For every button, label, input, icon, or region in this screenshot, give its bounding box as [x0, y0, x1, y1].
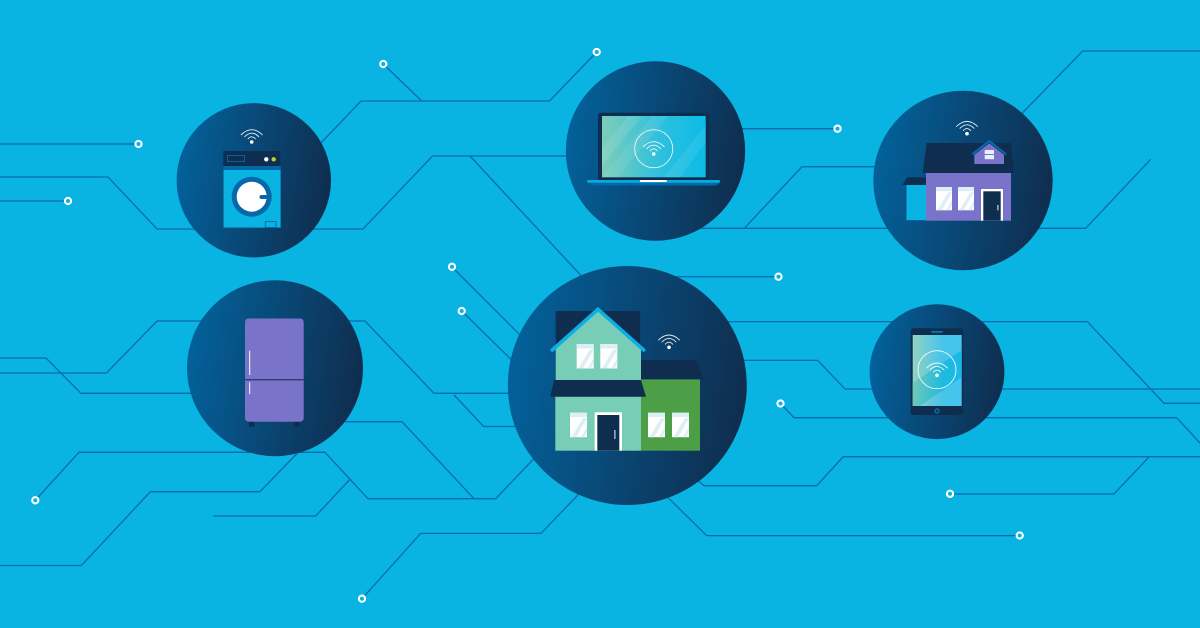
- icon: laptop: [587, 113, 720, 186]
- icon: refrigerator: [245, 318, 304, 427]
- panel: laptop: [566, 61, 745, 241]
- icon: house wifi: [956, 121, 978, 136]
- icon: purple house: [902, 141, 1014, 221]
- panel: refrigerator: [187, 280, 363, 456]
- panel: washing machine: [177, 103, 331, 258]
- panel: purple house: [873, 91, 1053, 270]
- icon: washer wifi: [241, 130, 262, 144]
- panel: central green house: [508, 266, 747, 505]
- panel: tablet: [870, 304, 1004, 439]
- icon: washing machine: [223, 151, 281, 228]
- icon: house wifi: [658, 335, 680, 349]
- icon: green house: [550, 309, 703, 451]
- icon: tablet: [911, 328, 963, 415]
- connector end nodes: [32, 49, 1023, 602]
